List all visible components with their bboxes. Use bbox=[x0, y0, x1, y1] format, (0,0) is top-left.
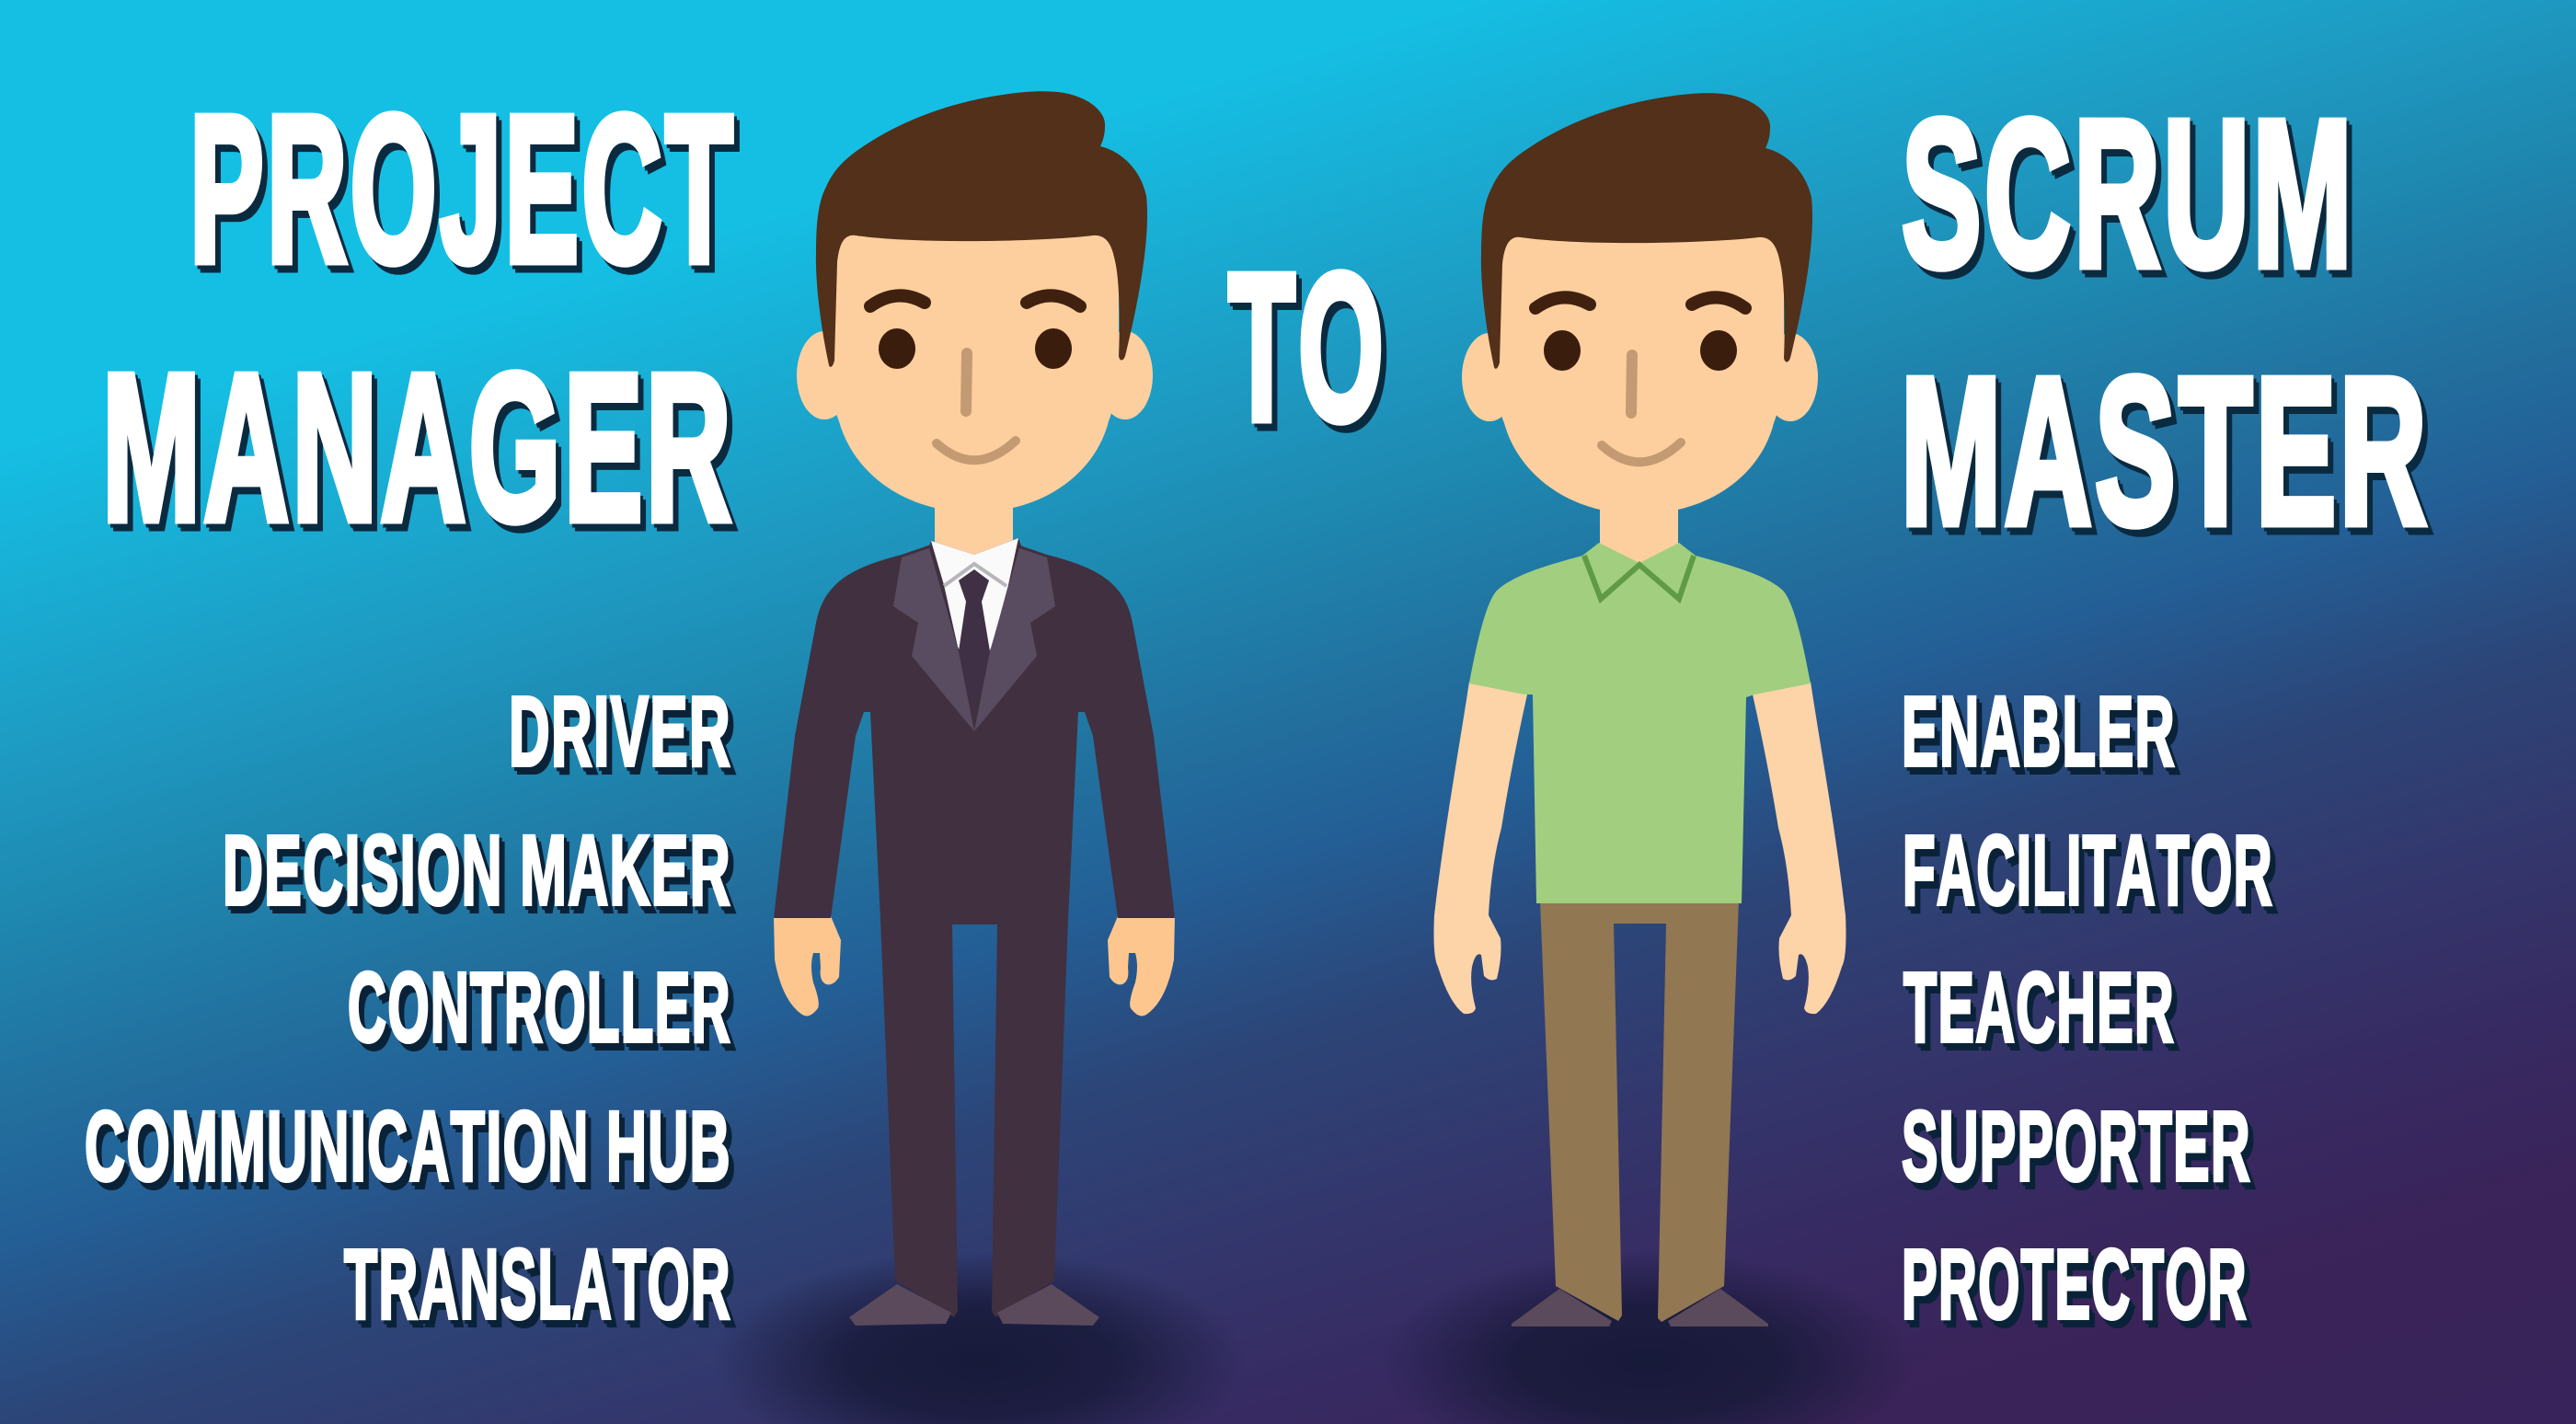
head bbox=[1462, 93, 1818, 570]
heading: project manager: PROJECT bbox=[190, 73, 736, 306]
heading: project manager bbox=[102, 73, 736, 565]
shoes bbox=[1512, 1289, 1768, 1326]
list: project manager roles: TRANSLATOR bbox=[344, 1228, 731, 1339]
list: scrum master roles bbox=[1902, 675, 2273, 1339]
trousers bbox=[1540, 901, 1739, 1322]
list: scrum master roles: SUPPORTER bbox=[1902, 1090, 2251, 1201]
polo collar bbox=[1584, 556, 1694, 599]
list: project manager roles bbox=[85, 675, 731, 1339]
floor shadow: project manager bbox=[713, 1251, 1247, 1424]
heading: scrum master bbox=[1901, 77, 2430, 568]
shoes bbox=[849, 1284, 1099, 1326]
white shirt and collar bbox=[931, 538, 1018, 681]
list: scrum master roles: ENABLER bbox=[1902, 675, 2176, 787]
tie bbox=[959, 569, 990, 715]
list: project manager roles: COMMUNICATION HUB bbox=[85, 1090, 731, 1201]
list: project manager roles: DECISION MAKER bbox=[223, 814, 731, 925]
figure: project manager in suit bbox=[774, 91, 1175, 1326]
polo shirt bbox=[1469, 543, 1811, 903]
suit shoulders over neck bbox=[920, 538, 1030, 570]
suit jacket and trousers bbox=[774, 545, 1175, 1317]
head bbox=[797, 91, 1153, 568]
floor shadow: scrum master bbox=[1380, 1251, 1914, 1424]
lapels bbox=[893, 548, 1055, 731]
figure: scrum master in polo bbox=[1433, 93, 1846, 1326]
arms bbox=[1433, 682, 1846, 1014]
heading: project manager: MANAGER bbox=[102, 331, 734, 565]
list: scrum master roles: FACILITATOR bbox=[1903, 814, 2273, 925]
list: project manager roles: CONTROLLER bbox=[348, 951, 731, 1062]
list: project manager roles: DRIVER bbox=[509, 675, 731, 787]
list: scrum master roles: TEACHER bbox=[1903, 951, 2175, 1062]
suit hands bbox=[774, 916, 1175, 1016]
heading: to: TO bbox=[1228, 231, 1386, 465]
list: scrum master roles: PROTECTOR bbox=[1902, 1228, 2248, 1339]
